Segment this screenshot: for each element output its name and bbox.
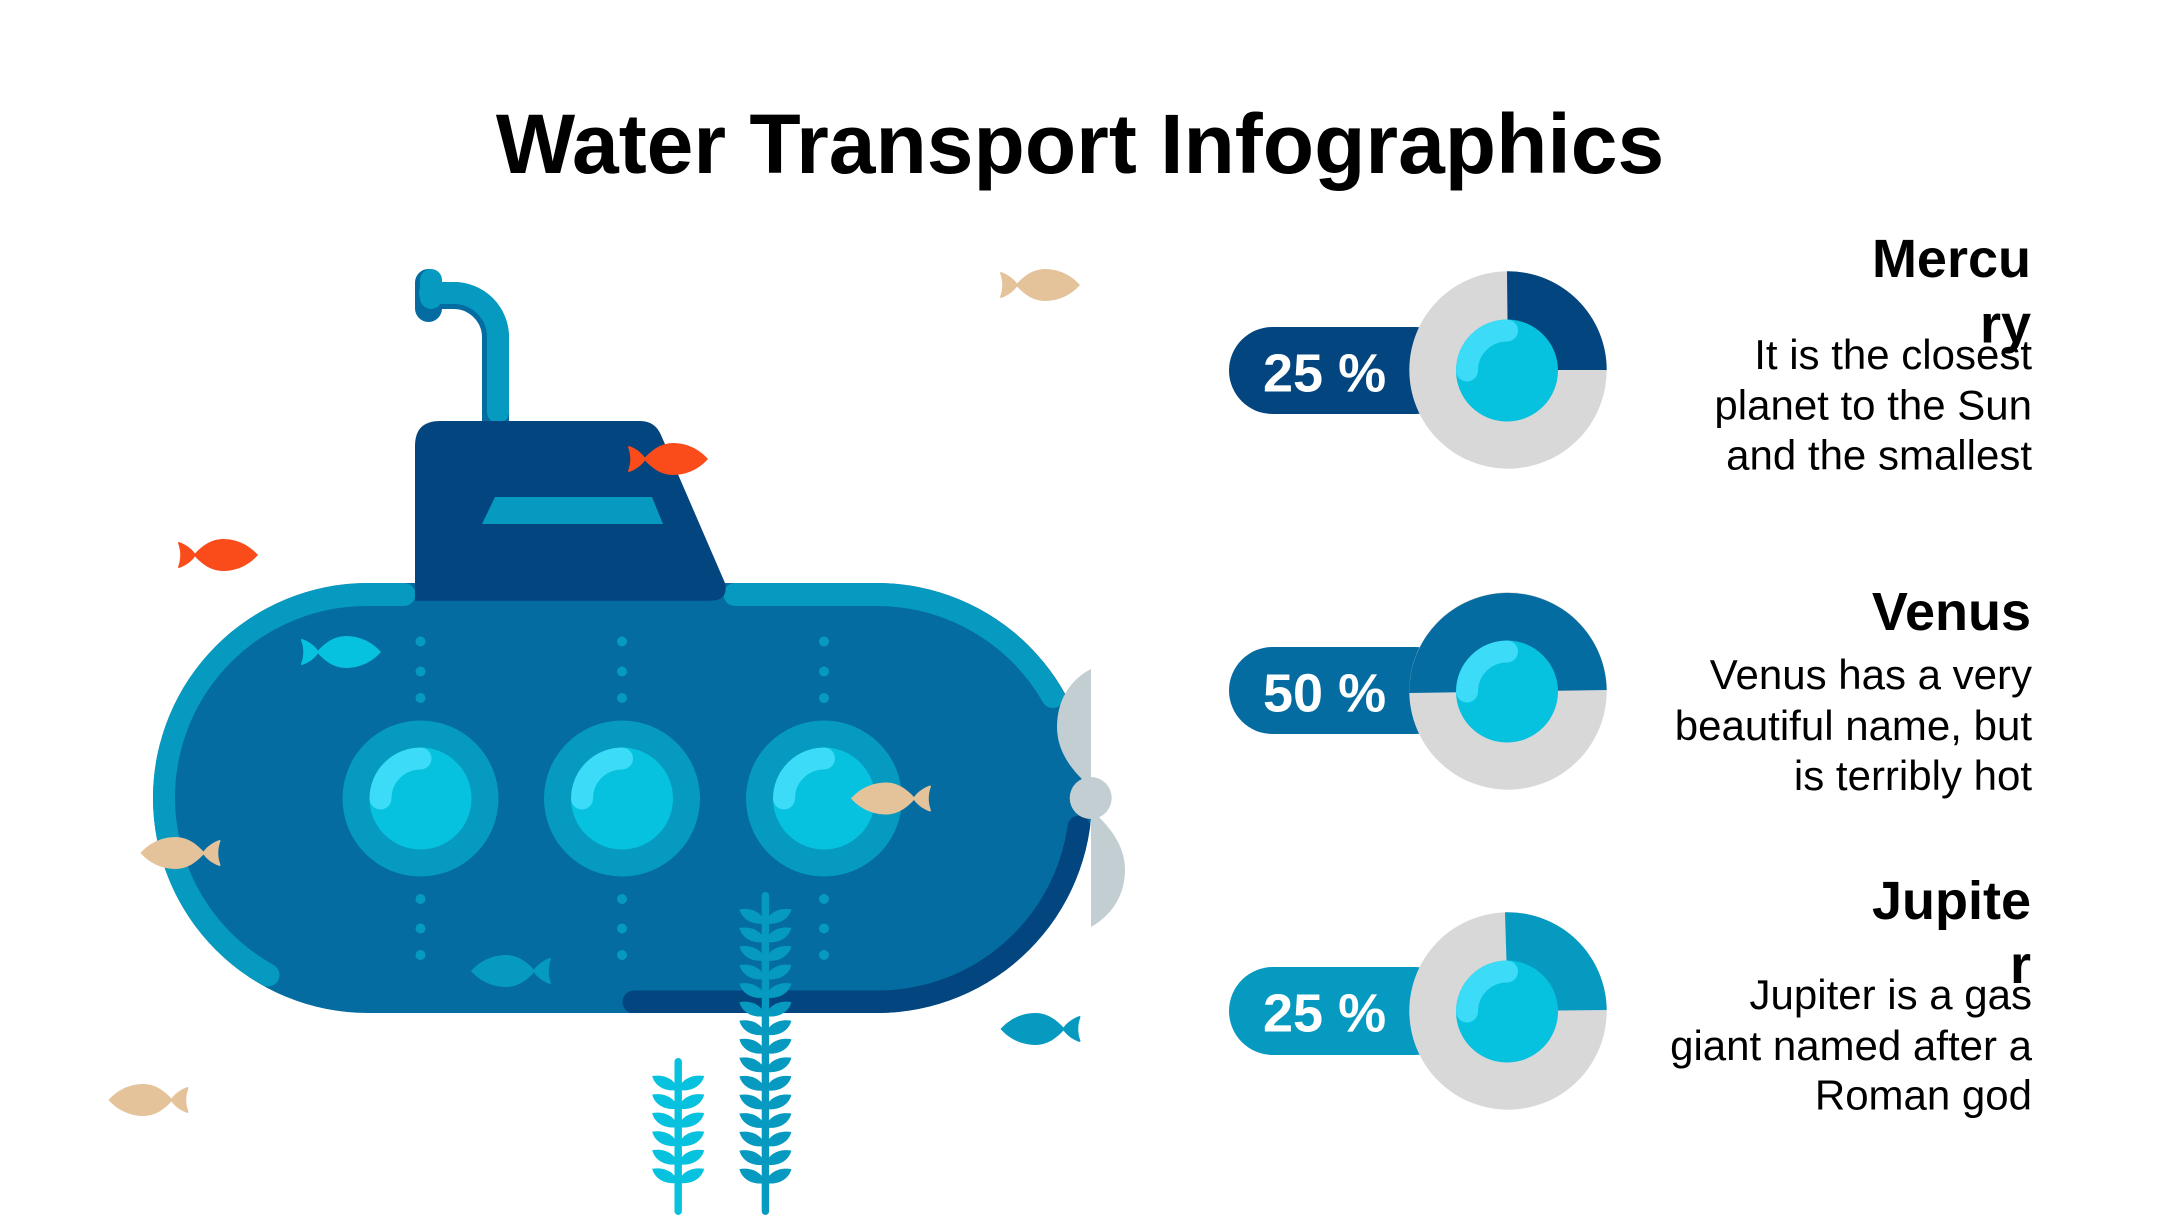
donut: [1409, 912, 1607, 1110]
illustration: submarine: [153, 269, 1125, 1013]
percent pill: [1229, 327, 1459, 414]
heading: ry: [1980, 294, 2031, 354]
rivet dots: [416, 636, 829, 960]
description: It is the closest: [1754, 331, 2032, 378]
description: beautiful name, but: [1675, 702, 2032, 749]
porthole 2: [544, 720, 700, 876]
fish: tan on porthole: [851, 782, 931, 814]
fish: cyan on hull: [301, 636, 381, 668]
periscope: [415, 269, 498, 425]
description: Jupiter is a gas: [1750, 971, 2032, 1018]
fish: tan top right: [1000, 269, 1080, 301]
conning tower: [415, 421, 726, 601]
text: Jupiter: [1670, 871, 2033, 1118]
description: Roman god: [1815, 1072, 2032, 1118]
hull: [153, 583, 1092, 1013]
description: planet to the Sun: [1714, 382, 2032, 428]
seaweed: tall: [739, 892, 791, 1215]
text: Mercury: [1714, 229, 2032, 478]
fish: tan left: [140, 837, 220, 869]
description: Venus has a very: [1710, 651, 2032, 698]
porthole 3: [746, 720, 902, 876]
fish: tan bottom left: [108, 1084, 188, 1116]
fish: teal on hull: [471, 955, 551, 987]
description: giant named after a: [1670, 1022, 2033, 1069]
gauge: Mercury 25%: [1229, 271, 1607, 469]
propeller: [1057, 669, 1125, 927]
description: is terribly hot: [1794, 752, 2032, 799]
gauge: Venus 50%: [1229, 592, 1607, 790]
seaweed: short: [652, 1058, 704, 1215]
heading: Venus: [1872, 582, 2031, 642]
percent pill: [1229, 967, 1459, 1055]
percent pill: [1229, 647, 1459, 734]
heading: Jupite: [1872, 871, 2031, 931]
gauge: Jupiter 25%: [1229, 912, 1607, 1110]
heading: Mercu: [1872, 229, 2031, 289]
description: and the smallest: [1726, 432, 2032, 478]
donut: [1409, 592, 1607, 790]
heading: r: [2010, 935, 2031, 995]
hull rim: highlights and shadow: [163, 594, 1079, 1002]
text: Venus: [1675, 582, 2032, 799]
percent label: 25 %: [1263, 344, 1386, 404]
title: Water Transport Infographics: [496, 97, 1664, 191]
porthole 1: [342, 720, 498, 876]
tower window: [482, 497, 663, 524]
donut: [1409, 271, 1607, 469]
percent label: 25 %: [1263, 984, 1386, 1044]
percent label: 50 %: [1263, 664, 1386, 724]
fish: red on tower: [628, 443, 708, 475]
fish: teal bottom right: [1000, 1013, 1080, 1045]
fish: red left: [178, 539, 258, 571]
